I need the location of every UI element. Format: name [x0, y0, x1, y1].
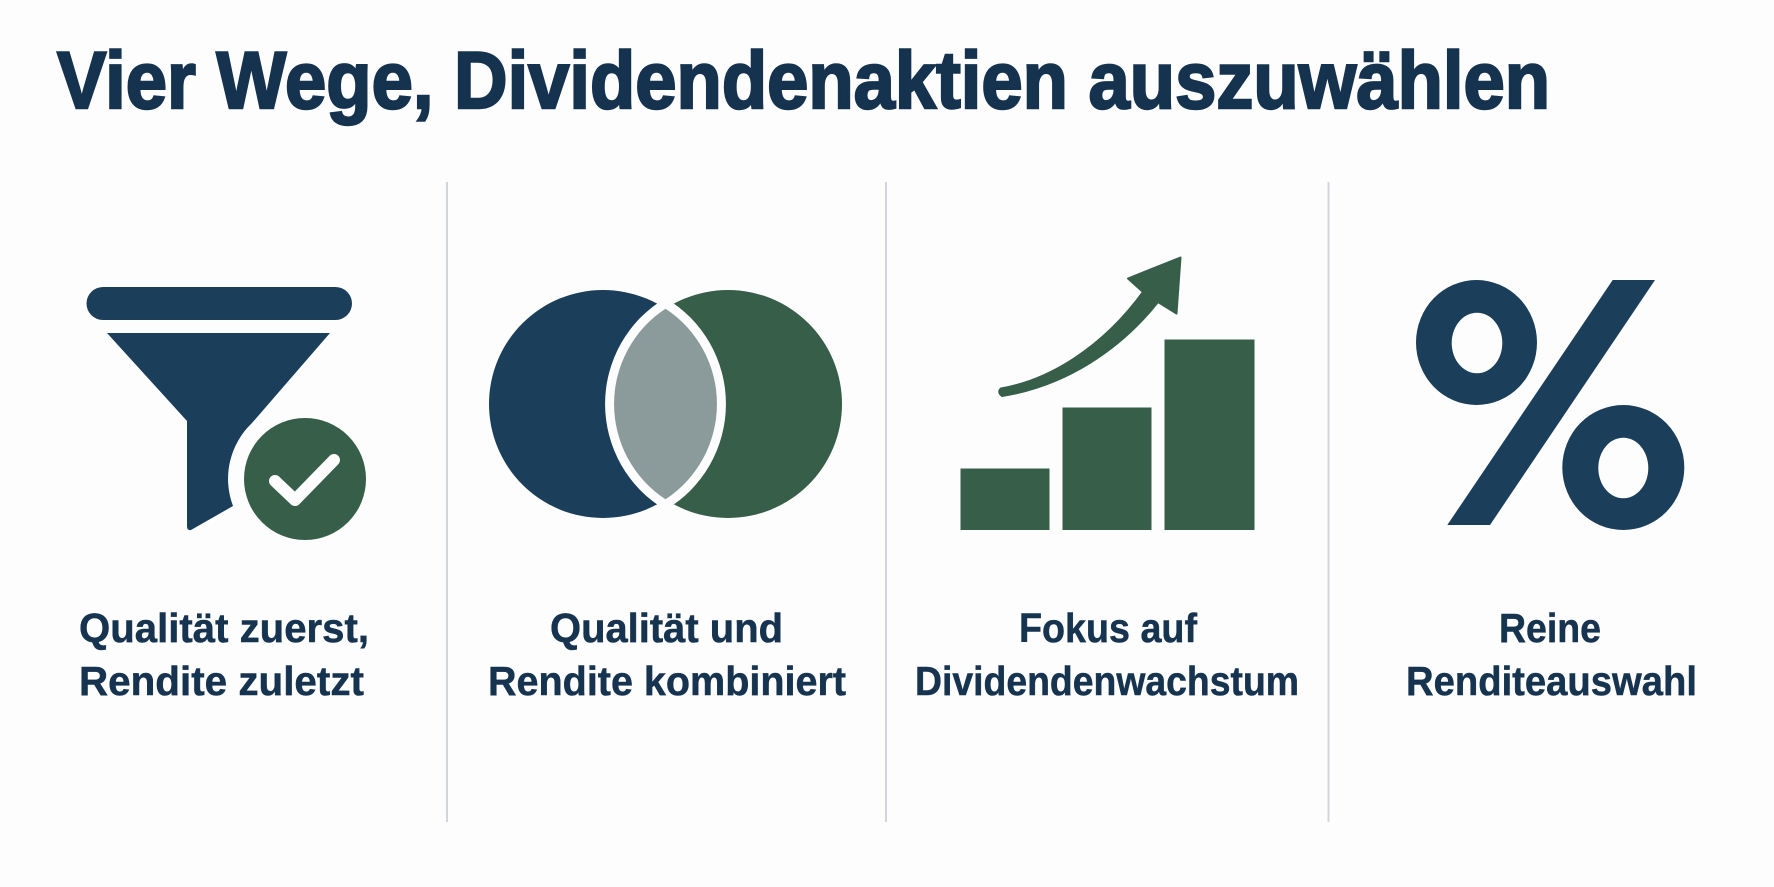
- icon: percent sign: [1416, 280, 1684, 530]
- label: Qualität und Rendite kombiniert: Qualität und: [550, 605, 783, 651]
- label: Qualität und Rendite kombiniert: Rendite kombiniert: [488, 658, 846, 704]
- label: Fokus auf Dividendenwachstum: [915, 605, 1299, 704]
- label: Qualität zuerst, Rendite zuletzt: [79, 605, 369, 704]
- label: Qualität und Rendite kombiniert: [488, 605, 846, 704]
- panel: Qualität zuerst: [79, 287, 369, 704]
- icon: funnel with check badge: [86, 287, 366, 540]
- label: Reine Renditeauswahl: [1406, 605, 1697, 704]
- label: Fokus auf Dividendenwachstum: Fokus auf: [1019, 605, 1197, 651]
- bar medium: [1062, 408, 1152, 530]
- funnel body: [107, 333, 330, 530]
- label: Qualität zuerst, Rendite zuletzt: Qualität zuerst,: [79, 605, 369, 651]
- icon: venn diagram: [489, 290, 842, 518]
- label: Qualität zuerst, Rendite zuletzt: Rendite zuletzt: [79, 658, 364, 704]
- panel: Reine Renditeauswahl: [1406, 280, 1697, 704]
- label: Fokus auf Dividendenwachstum: Dividendenwachstum: [915, 658, 1299, 704]
- funnel rim: [86, 287, 352, 320]
- panel: Dividendenwachstum: [915, 258, 1299, 704]
- icon: rising bars with arrow: [960, 258, 1254, 530]
- check badge: [244, 418, 366, 540]
- arrow: [999, 258, 1180, 396]
- bar large: [1164, 340, 1254, 530]
- label: Reine Renditeauswahl: Reine: [1499, 605, 1601, 651]
- bar small: [960, 468, 1050, 530]
- label: Reine Renditeauswahl: Renditeauswahl: [1406, 658, 1697, 704]
- panel: Qualität und Rendite: [488, 290, 846, 704]
- title: Vier Wege, Dividendenaktien auszuwählen: [57, 36, 1550, 126]
